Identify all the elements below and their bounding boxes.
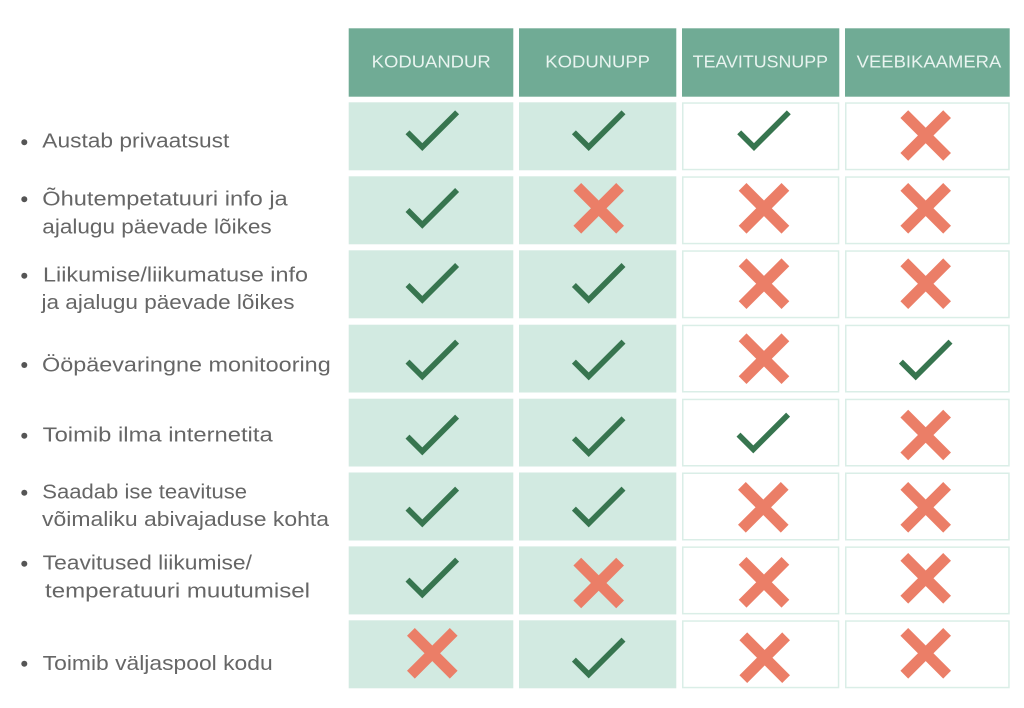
- feature label: Õhutempetatuuri info ja: [42, 187, 289, 211]
- cell: teavitusnupp yes: [683, 399, 839, 466]
- cell: veebikaamera no: [846, 103, 1009, 170]
- header: VEEBIKAAMERA: VEEBIKAAMERA: [857, 51, 1002, 71]
- header: VEEBIKAAMERA: [845, 28, 1010, 97]
- feature label: Saadab ise teavituse: [42, 481, 247, 503]
- row 1: Austab privaatsust: [21, 102, 1009, 170]
- row 2: Õhutempetatuuri info: [21, 176, 1009, 244]
- cell: kodunupp no: [519, 176, 676, 244]
- cell: koduandur yes: [349, 176, 513, 244]
- feature label: Ööpäevaringne monitooring: [42, 355, 331, 377]
- cell: kodunupp yes: [519, 102, 676, 170]
- feature label: temperatuuri muutumisel: [45, 580, 310, 602]
- row 3: Liikumise/liikumatuse info: [21, 250, 1009, 318]
- cell: kodunupp yes: [519, 620, 676, 688]
- cell: koduandur yes: [349, 250, 513, 318]
- feature label: ja ajalugu päevade lõikes: [40, 292, 295, 314]
- feature label: [21, 481, 330, 531]
- feature label: ajalugu päevade lõikes: [42, 216, 272, 238]
- header: TEAVITUSNUPP: TEAVITUSNUPP: [693, 51, 828, 71]
- feature label: võimaliku abivajaduse kohta: [42, 509, 330, 531]
- cell: veebikaamera no: [846, 177, 1009, 244]
- feature label: Teavitused liikumise/: [43, 552, 252, 574]
- cell: kodunupp yes: [519, 250, 676, 318]
- cell: teavitusnupp no: [683, 325, 839, 392]
- row 7: Teavitused liikumise: [21, 546, 1009, 614]
- header: KODUNUPP: [519, 28, 676, 97]
- cell: teavitusnupp no: [683, 473, 839, 540]
- cell: koduandur yes: [349, 546, 513, 614]
- row 5: Toimib ilma internetita: [21, 399, 1009, 466]
- header: TEAVITUSNUPP: [682, 28, 839, 97]
- feature label: [21, 265, 308, 314]
- feature label: Liikumise/liikumatuse info: [43, 265, 308, 287]
- cell: koduandur yes: [349, 102, 513, 170]
- cell: veebikaamera yes: [846, 325, 1009, 392]
- cell: veebikaamera no: [846, 399, 1009, 466]
- cell: kodunupp yes: [519, 325, 676, 392]
- feature label: [21, 187, 289, 238]
- cell: koduandur no: [349, 620, 513, 688]
- row 6: Saadab ise teavituse: [21, 472, 1009, 540]
- cell: teavitusnupp yes: [683, 103, 839, 170]
- feature label: Toimib väljaspool kodu: [43, 653, 273, 675]
- cell: koduandur yes: [349, 325, 513, 392]
- row 4: Ööpäevaringne monitooring: [21, 325, 1009, 392]
- cell: koduandur yes: [349, 399, 513, 466]
- cell: veebikaamera no: [846, 473, 1009, 540]
- cell: koduandur yes: [349, 472, 513, 540]
- cell: kodunupp yes: [519, 472, 676, 540]
- row 8: Toimib väljaspool kodu: [21, 620, 1009, 688]
- feature label: Toimib ilma internetita: [43, 425, 274, 447]
- feature label: Austab privaatsust: [42, 130, 230, 152]
- cell: teavitusnupp no: [683, 621, 839, 688]
- cell: teavitusnupp no: [683, 547, 839, 614]
- cell: kodunupp no: [519, 546, 676, 614]
- feature label: [21, 552, 310, 602]
- cell: teavitusnupp no: [683, 251, 839, 318]
- cell: teavitusnupp no: [683, 177, 839, 244]
- header: KODUANDUR: [349, 28, 513, 97]
- cell: veebikaamera no: [846, 251, 1009, 318]
- header row: [349, 28, 1010, 97]
- cell: kodunupp yes: [519, 399, 676, 466]
- header: KODUNUPP: KODUNUPP: [545, 51, 650, 71]
- header: KODUANDUR: KODUANDUR: [372, 51, 491, 71]
- cell: veebikaamera no: [846, 621, 1009, 688]
- cell: veebikaamera no: [846, 547, 1009, 614]
